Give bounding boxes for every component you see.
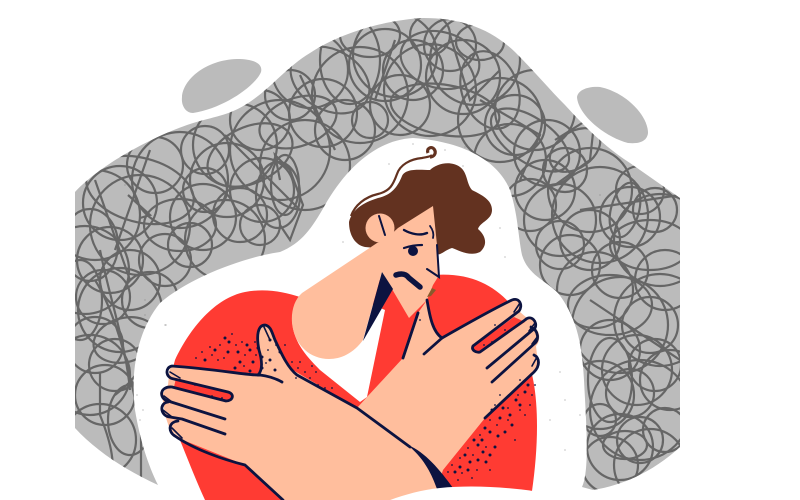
red gap between far fingers <box>473 317 525 352</box>
facial features <box>379 216 439 287</box>
hair curl <box>428 148 435 157</box>
stubble <box>427 288 436 297</box>
illustration: anxious person surrounded by tangled thoughts <box>75 18 680 500</box>
red gap between near fingers <box>174 378 232 401</box>
far hand outline <box>403 299 538 418</box>
hair strand <box>351 155 432 216</box>
person <box>162 148 539 500</box>
white foreground curve <box>385 487 540 500</box>
dust specks <box>125 110 600 450</box>
neck shadow <box>363 272 393 341</box>
grey oval left <box>182 59 261 113</box>
eye <box>408 246 418 256</box>
speckle shading <box>195 320 535 480</box>
grey thought cloud <box>75 18 680 490</box>
face and neck <box>292 206 438 359</box>
scribble tangle <box>75 18 680 490</box>
far arm and hand <box>357 300 539 488</box>
ear <box>366 214 394 242</box>
hair <box>349 163 492 254</box>
far arm cuff <box>408 445 453 490</box>
near arm and hand <box>162 325 450 500</box>
red torso <box>170 275 537 500</box>
white shirt <box>292 295 385 402</box>
grey oval right <box>577 87 648 143</box>
near hand outline <box>162 325 410 500</box>
